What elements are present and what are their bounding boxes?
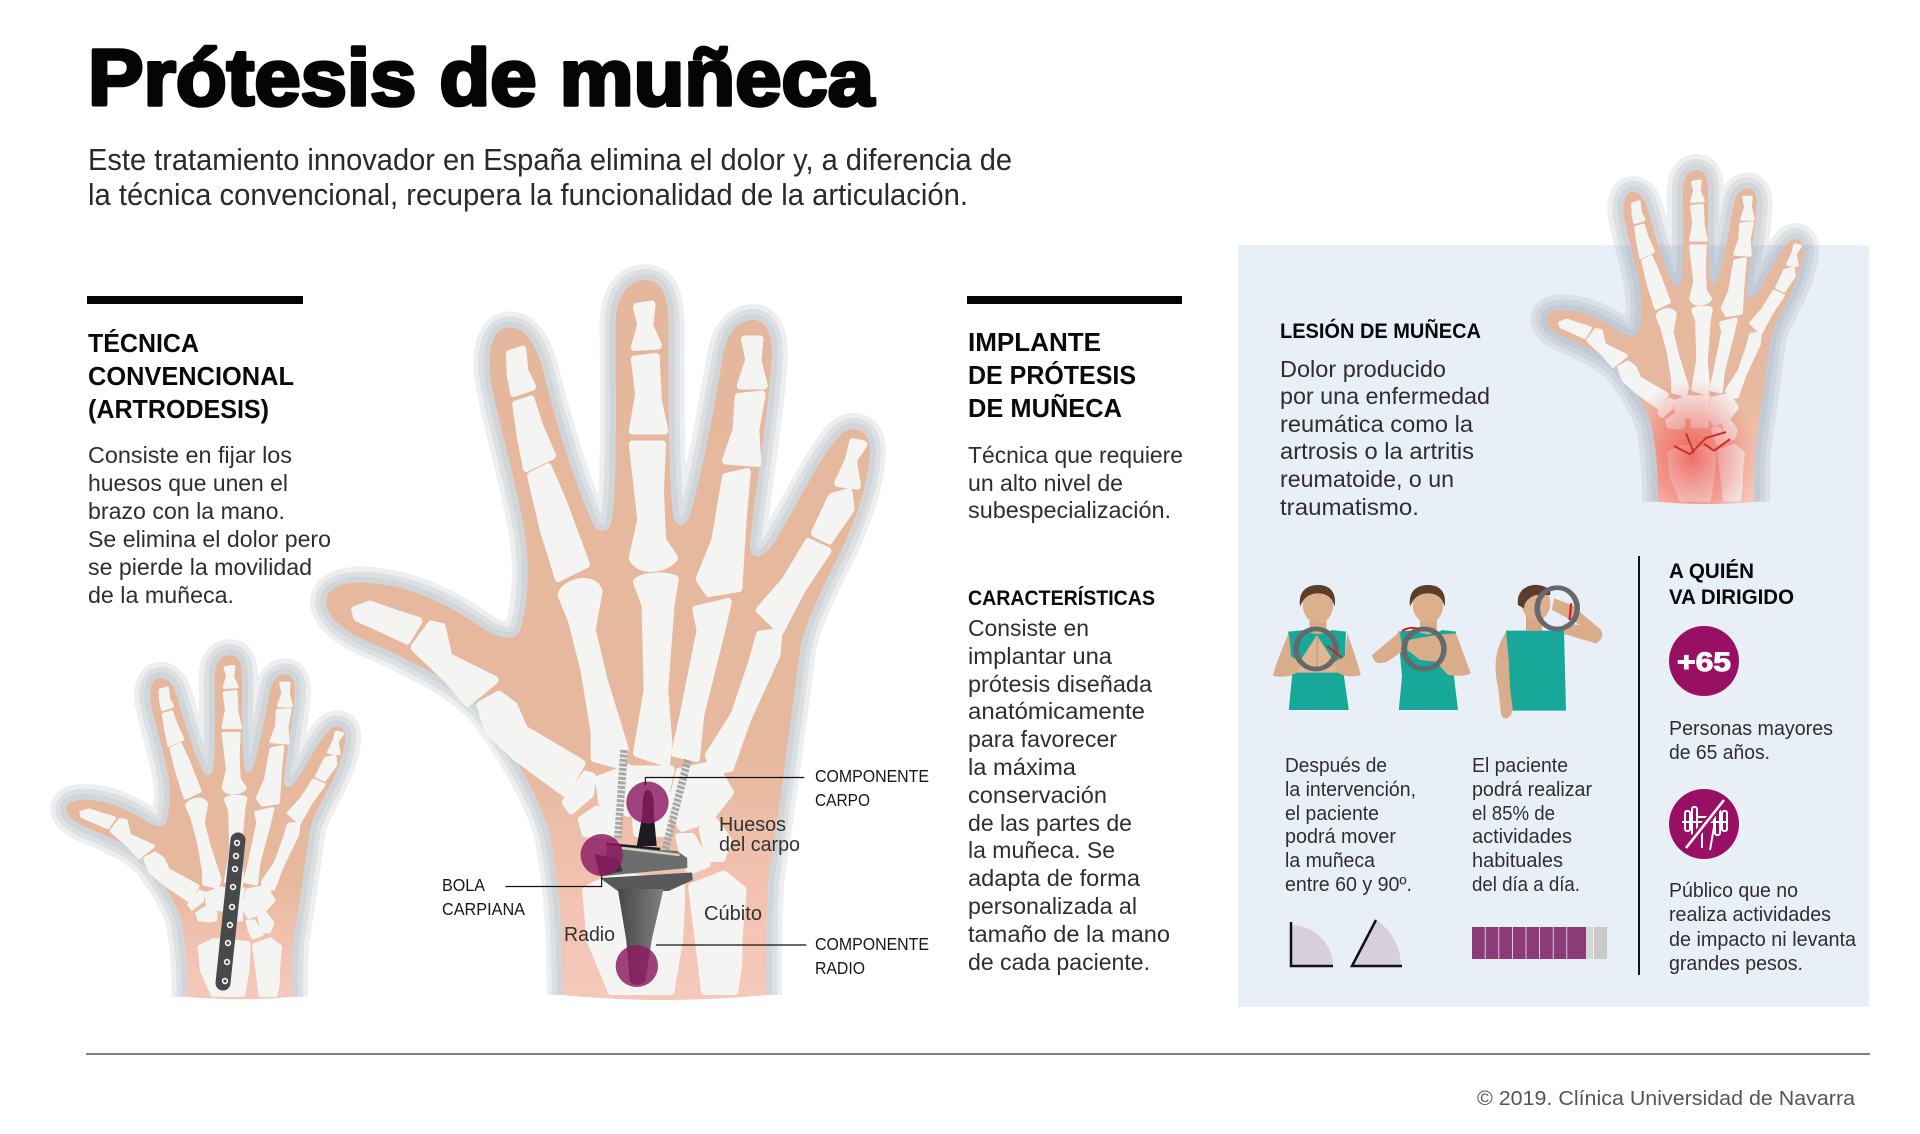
- icon: metal plate: [223, 840, 239, 983]
- labels: parts: CARPO: [815, 790, 870, 810]
- icon: carpal component: [603, 790, 687, 876]
- heading: implante: IMPLANTE: [968, 327, 1101, 357]
- text: activities: actividades: [1472, 825, 1572, 848]
- text: activities: el 85% de: [1472, 802, 1555, 825]
- illustration: wrist exercises figures: [1273, 585, 1602, 719]
- icon: +65 badge: [1669, 626, 1739, 696]
- labels: parts: del carpo: [719, 834, 800, 856]
- heading: a quien: [1669, 558, 1794, 609]
- text: movement: Después de: [1285, 754, 1387, 777]
- text: movement: [1285, 754, 1416, 896]
- heading: tecnica convencional: TÉCNICA: [88, 328, 199, 358]
- icon: no weights badge: [1669, 789, 1739, 859]
- text: personas mayores: Personas mayores: [1669, 717, 1833, 740]
- illustration: hand with wrist prosthesis: [326, 280, 929, 1000]
- text: publico: [1669, 879, 1857, 975]
- text: caracteristicas description: [968, 615, 1170, 975]
- figure 3: [1496, 585, 1602, 719]
- text: lesion description: artrosis o la artritis: [1280, 438, 1474, 464]
- text: tecnica description: Se elimina el dolor pero: [88, 526, 331, 552]
- icon: angle 60 degrees: [1352, 920, 1402, 966]
- text: implante description: Técnica que requiere: [968, 442, 1183, 468]
- text: activities: del día a día.: [1472, 873, 1580, 896]
- labels: parts: Radio: [564, 924, 615, 946]
- text: caracteristicas description: conservación: [968, 782, 1107, 808]
- text: lesion description: [1280, 356, 1490, 520]
- text: activities: habituales: [1472, 849, 1563, 872]
- icon: angle 90 degrees: [1291, 922, 1333, 966]
- text: caracteristicas description: la máxima: [968, 754, 1077, 780]
- panel: lesion background: [1238, 245, 1869, 1007]
- heading: implante: [968, 327, 1136, 423]
- heading: tecnica convencional: [88, 328, 294, 424]
- icon: +65 badge: +65: [1677, 647, 1731, 677]
- text: publico: de impacto ni levanta: [1669, 928, 1857, 951]
- text: implante description: un alto nivel de: [968, 470, 1123, 496]
- labels: parts: [442, 766, 929, 978]
- subtitle text: Este tratamiento innovador en España elimina el dolor y, a diferencia de: [88, 143, 1012, 177]
- text: activities: El paciente: [1472, 754, 1568, 777]
- title: Prótesis de muñeca: [88, 33, 875, 122]
- icon: carpal ball: [594, 854, 623, 876]
- labels: parts: COMPONENTE: [815, 934, 929, 954]
- subtitle text: [88, 143, 1012, 212]
- text: tecnica description: de la muñeca.: [88, 582, 234, 608]
- icon: screws: [618, 750, 688, 850]
- panel: tecnica convencional text: [87, 296, 331, 608]
- text: caracteristicas description: implantar una: [968, 643, 1113, 669]
- text: tecnica description: Consiste en fijar los: [88, 442, 292, 468]
- figure 1: [1273, 585, 1361, 710]
- text: movement: el paciente: [1285, 802, 1379, 825]
- text: lesion description: traumatismo.: [1280, 494, 1419, 520]
- text: caracteristicas description: de las partes de: [968, 810, 1132, 836]
- text: publico: Público que no: [1669, 879, 1798, 902]
- heading: tecnica convencional: CONVENCIONAL: [88, 361, 294, 391]
- footer credit: © 2019. Clínica Universidad de Navarra: [1477, 1088, 1856, 1110]
- heading: implante: DE PRÓTESIS: [968, 360, 1136, 390]
- text: caracteristicas description: adapta de forma: [968, 865, 1141, 891]
- panel: a quien va dirigido: [1669, 558, 1857, 975]
- icon: fracture marks: [1674, 432, 1730, 454]
- text: caracteristicas description: anatómicamente: [968, 698, 1145, 724]
- text: tecnica description: se pierde la movilidad: [88, 554, 312, 580]
- illustration: injured hand: [1546, 170, 1803, 504]
- text: caracteristicas description: de cada paciente.: [968, 949, 1150, 975]
- heading: a quien: VA DIRIGIDO: [1669, 585, 1794, 609]
- text: movement: la intervención,: [1285, 778, 1416, 801]
- heading: tecnica convencional: (ARTRODESIS): [88, 394, 269, 424]
- text: caracteristicas description: la muñeca. Se: [968, 837, 1115, 863]
- heading: caracteristicas: CARACTERÍSTICAS: [968, 585, 1155, 610]
- text: tecnica description: huesos que unen el: [88, 470, 288, 496]
- heading: implante: DE MUÑECA: [968, 393, 1122, 423]
- text: publico: realiza actividades: [1669, 903, 1831, 926]
- text: lesion description: Dolor producido: [1280, 356, 1446, 382]
- text: caracteristicas description: personalizada al: [968, 893, 1137, 919]
- icon: radial component: [600, 872, 693, 984]
- text: caracteristicas description: Consiste en: [968, 615, 1089, 641]
- text: caracteristicas description: prótesis diseñada: [968, 671, 1153, 697]
- text: lesion description: reumatoide, o un: [1280, 466, 1454, 492]
- panel: lesion text: [1280, 318, 1490, 520]
- text: personas mayores: de 65 años.: [1669, 741, 1770, 764]
- labels: parts: RADIO: [815, 958, 865, 978]
- text: caracteristicas description: para favorecer: [968, 726, 1117, 752]
- heading: lesion: LESIÓN DE MUÑECA: [1280, 318, 1481, 343]
- text: movement: entre 60 y 90º.: [1285, 873, 1412, 896]
- text: caracteristicas description: tamaño de la mano: [968, 921, 1170, 947]
- text: activities: podrá realizar: [1472, 778, 1592, 801]
- text: personas mayores: [1669, 717, 1833, 764]
- labels: parts: CARPIANA: [442, 899, 525, 919]
- labels: parts: Huesos: [719, 814, 786, 836]
- illustration: hand with fixation plate: [66, 655, 345, 999]
- text: publico: grandes pesos.: [1669, 952, 1803, 975]
- subtitle text: la técnica convencional, recupera la funcionalidad de la articulación.: [88, 178, 968, 212]
- highlight circles: [580, 782, 669, 987]
- panel: implante text: [967, 296, 1183, 975]
- text: implante description: [968, 442, 1183, 523]
- leader lines: [505, 778, 806, 945]
- labels: parts: COMPONENTE: [815, 766, 929, 786]
- figure 2: [1372, 585, 1471, 710]
- text: implante description: subespecialización.: [968, 497, 1171, 523]
- text: activities: [1472, 754, 1592, 896]
- text: movement: podrá mover: [1285, 825, 1396, 848]
- text: movement: la muñeca: [1285, 849, 1376, 872]
- chart: 85 percent bar: [1472, 927, 1607, 959]
- text: tecnica description: brazo con la mano.: [88, 498, 285, 524]
- text: tecnica description: [88, 442, 331, 608]
- labels: parts: BOLA: [442, 875, 485, 895]
- text: lesion description: por una enfermedad: [1280, 383, 1490, 409]
- divider: vertical: [1638, 556, 1640, 975]
- labels: parts: Cúbito: [704, 903, 762, 925]
- text: lesion description: reumática como la: [1280, 411, 1474, 437]
- heading: a quien: A QUIÉN: [1669, 558, 1754, 583]
